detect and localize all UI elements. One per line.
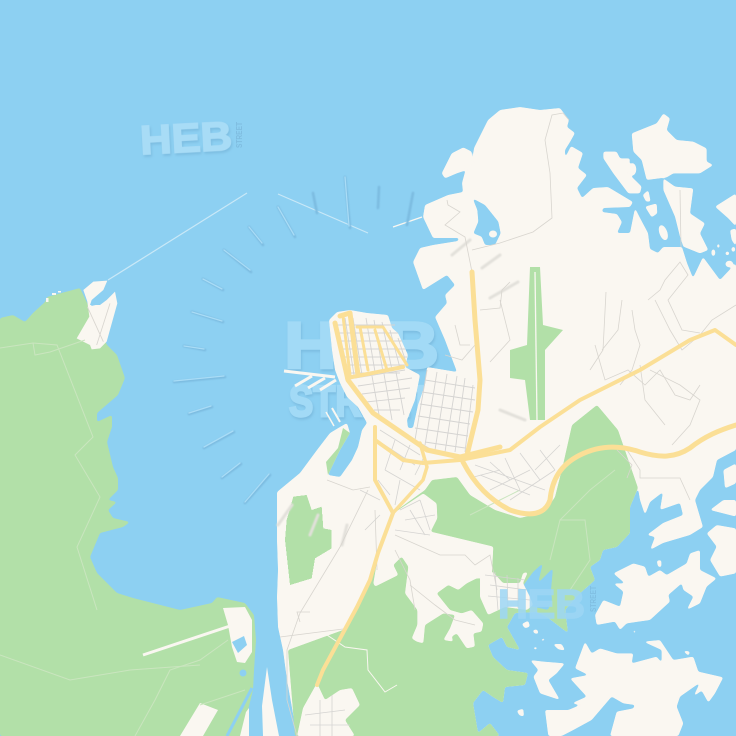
panel: north cape bbox=[77, 281, 117, 349]
panel: coastal village bbox=[480, 572, 533, 615]
town street grid bbox=[335, 318, 412, 420]
panel: mainland and islands bbox=[277, 107, 736, 736]
road: south trunk bbox=[317, 427, 393, 685]
panel: south green forest bbox=[288, 405, 638, 736]
land shadow streaks bbox=[278, 240, 525, 545]
minor roads bbox=[280, 113, 736, 736]
south-east islands bbox=[517, 463, 736, 736]
road: south-east link bbox=[393, 443, 427, 513]
left channel bank bbox=[240, 708, 249, 736]
pale roads through forest bbox=[0, 340, 615, 736]
road: east highway bbox=[460, 330, 736, 460]
water shadow streaks bbox=[174, 177, 413, 503]
road: junction link bbox=[375, 440, 460, 463]
watermark: central HEB bbox=[284, 308, 439, 426]
marina pier bbox=[284, 371, 340, 426]
road: southern highway bbox=[463, 425, 736, 514]
north bay water bbox=[473, 198, 501, 245]
watermark: top HEB: STREET bbox=[235, 122, 244, 148]
watermark: south HEB: STREET bbox=[589, 586, 598, 612]
road: airport highway bbox=[467, 272, 480, 455]
islet in north bay bbox=[489, 230, 497, 238]
north cape shoals bbox=[46, 291, 61, 302]
channel island bbox=[262, 667, 279, 736]
white track in south forest bbox=[327, 635, 397, 692]
east street grid bbox=[415, 370, 475, 452]
watermark: top HEB: HEB bbox=[139, 113, 233, 163]
north-east islands bbox=[442, 113, 736, 267]
road network bbox=[317, 272, 736, 685]
sea cables bbox=[108, 193, 422, 280]
panel: southern suburb bbox=[297, 683, 360, 736]
water fingers near southern village bbox=[520, 563, 553, 610]
panel: peninsula green park bbox=[285, 495, 332, 585]
panel: south-west headland bbox=[143, 607, 252, 736]
panel: southern town bbox=[373, 493, 493, 648]
road: town trunk bbox=[335, 323, 500, 457]
watermark: south HEB: HEB bbox=[498, 581, 585, 627]
water highlight streaks bbox=[174, 177, 349, 502]
watermark: central HEB: HEB bbox=[284, 308, 439, 382]
panel: airfield bbox=[510, 267, 563, 420]
mainland bbox=[277, 107, 736, 736]
panel: west coast forest bbox=[0, 288, 256, 736]
watermark: central HEB: STREET bbox=[289, 377, 432, 426]
panel: lagoon park bbox=[326, 428, 350, 475]
road: town avenues bbox=[340, 313, 407, 378]
inland street networks bbox=[305, 425, 560, 736]
